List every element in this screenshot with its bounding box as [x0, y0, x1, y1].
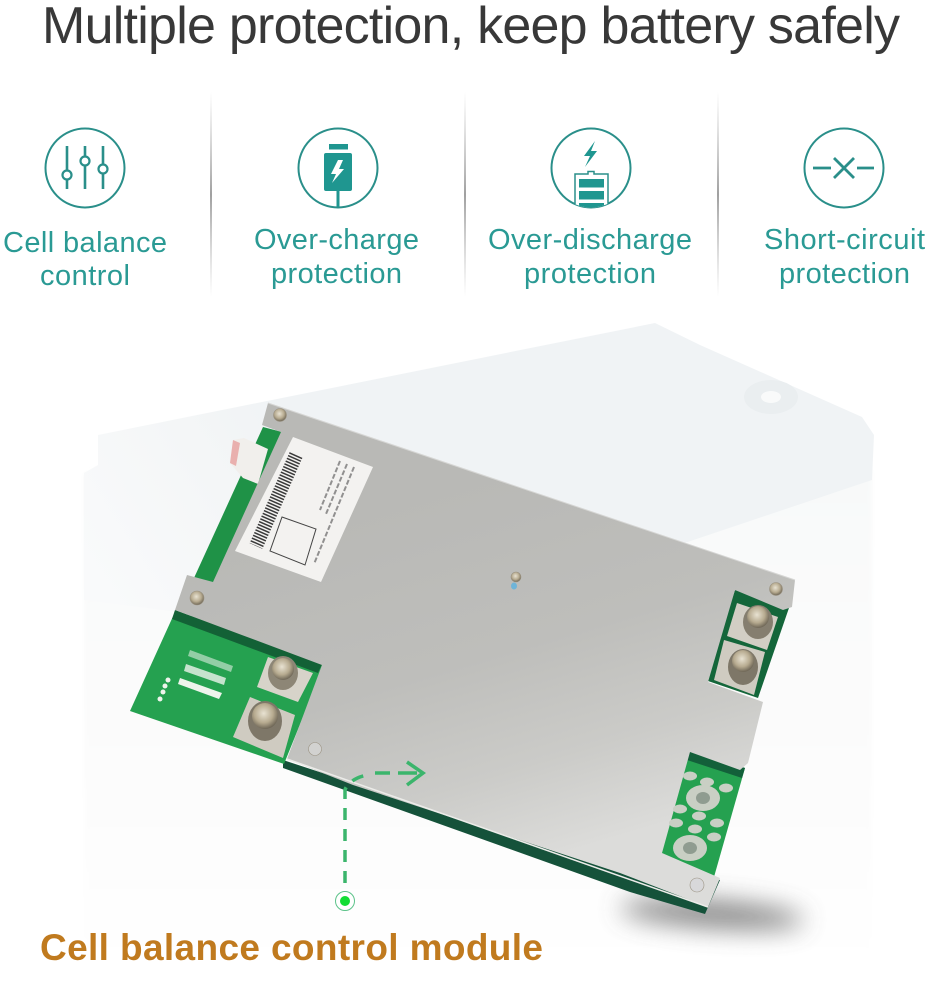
- shadow under the board: [619, 895, 805, 933]
- battery lid: [84, 323, 874, 640]
- callout dot: [336, 892, 354, 910]
- wiring box: [270, 517, 316, 565]
- pcb dark shade under plate: [172, 610, 322, 673]
- label: cell balance control: control: [40, 260, 130, 292]
- module caption: Cell balance control module: [40, 927, 543, 968]
- metal thin edges: [268, 403, 795, 580]
- divider lines between features: [210, 92, 719, 297]
- product label: [235, 437, 373, 582]
- dashed arrow callout: [345, 762, 423, 883]
- white connector: [230, 438, 268, 484]
- blue speck by centre screw: [511, 582, 517, 590]
- icon: broken circuit in a circle: [804, 128, 884, 208]
- left output terminals: [233, 656, 313, 758]
- icon: charging battery in a circle: [298, 128, 378, 208]
- label: cell balance control: Cell balance: [3, 227, 167, 259]
- feature: cell balance control: [3, 128, 167, 292]
- icon: sliders in a circle: [46, 128, 124, 208]
- pcb left strip: [194, 427, 282, 584]
- label: short-circuit protection: Short-circuit: [764, 224, 925, 256]
- label: short-circuit protection: protection: [779, 258, 910, 290]
- feature: over-charge protection: [254, 128, 419, 290]
- label: over-charge protection: protection: [271, 258, 402, 290]
- pcb underside edge: [283, 760, 720, 914]
- right output terminals: [714, 603, 778, 695]
- pcb right section with terminals: [705, 590, 790, 698]
- silkscreen patch: [158, 650, 233, 702]
- label: over-discharge protection: Over-discharge: [488, 224, 692, 256]
- battery body: [84, 470, 872, 1000]
- pcb lower-left section: [130, 612, 330, 764]
- corner screws: [190, 408, 782, 892]
- printed lines: [314, 461, 354, 564]
- pcb bottom right section: [660, 750, 745, 884]
- faded battery background: [84, 323, 874, 1000]
- metal heat sink plate: [175, 403, 795, 907]
- circuit board: [130, 403, 795, 914]
- battery terminal: [744, 380, 798, 414]
- feature: short-circuit protection: [764, 128, 925, 290]
- feature: over-discharge protection: [488, 128, 692, 290]
- pcb dark shade right: [687, 750, 745, 778]
- label: over-charge protection: Over-charge: [254, 224, 419, 256]
- barcode: [256, 455, 296, 546]
- solder pads: [669, 772, 733, 861]
- label: over-discharge protection: protection: [524, 258, 656, 290]
- icon: bolt and battery in a circle: [552, 128, 630, 209]
